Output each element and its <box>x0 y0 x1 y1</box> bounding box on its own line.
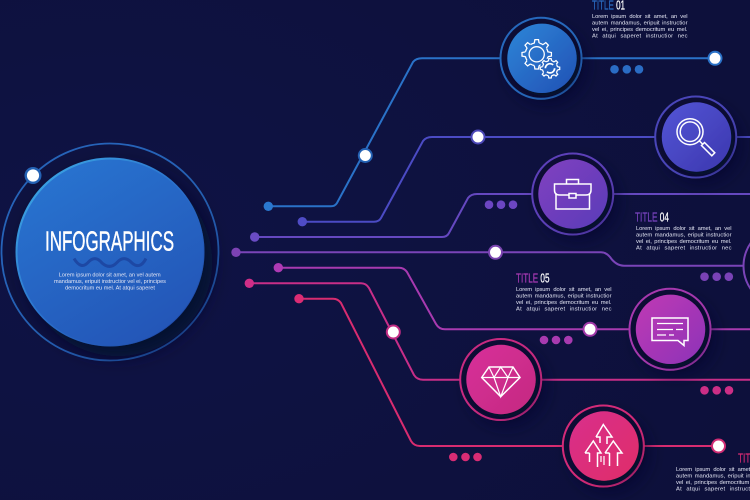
dots row 3 <box>485 200 517 209</box>
node circle 2: search <box>655 96 736 178</box>
icon: diamond <box>482 367 520 397</box>
main description: Lorem ipsum dolor sit amet, an vel autem <box>59 272 161 278</box>
main node <box>26 168 40 183</box>
text block: title 05: autem mandamus, eripuit instructior <box>516 294 612 300</box>
node circle 1: gears <box>500 18 582 99</box>
dots row 5 <box>540 336 573 344</box>
main circle panel <box>2 144 218 360</box>
icon: magnifier <box>677 119 715 156</box>
text block: title 01: At atqui saperet instructior nec <box>592 33 688 39</box>
dots row 4 <box>700 272 733 281</box>
wave decoration <box>74 258 146 266</box>
connector line 6: pink <box>245 279 750 380</box>
main circle panel: mandamus, eripuit instructior vel ei, principes <box>54 279 166 285</box>
node circle 4: partial <box>744 226 750 306</box>
text block: title 05: TITLE 05 <box>516 271 550 286</box>
text block: title 01: Lorem ipsum dolor sit amet, an vel <box>592 14 688 20</box>
connector line 5: magenta <box>274 263 750 336</box>
icon: gears <box>522 40 560 78</box>
text block: title 04: Lorem ipsum dolor sit amet, an vel <box>636 226 732 232</box>
connector line 3: violet <box>250 194 750 242</box>
text block: title 05 <box>516 271 612 312</box>
text block: title 04: TITLE 04 <box>635 210 669 225</box>
icon: briefcase <box>554 180 591 209</box>
node circle 6: diamond <box>460 339 541 420</box>
dots row 6 <box>700 386 733 395</box>
main circle panel: democritum eu mel. At atqui saperet <box>65 286 155 292</box>
text block: title 07 <box>676 451 750 492</box>
node circle 7: arrows <box>563 406 644 486</box>
text block: title 01: autem mandamus, eripuit instructior <box>592 20 688 26</box>
text block: title 04: autem mandamus, eripuit instructior <box>636 232 732 238</box>
connector line 1: blue <box>264 52 722 211</box>
text block: title 04: At atqui saperet instructior nec <box>636 246 732 252</box>
text block: title 05: At atqui saperet instructior nec <box>516 306 612 312</box>
dots row 7 <box>449 453 482 461</box>
text block: title 04: vel ei, principes democritum eu mel. <box>636 239 732 245</box>
connector line 2: indigo <box>298 130 750 226</box>
node circle 3: briefcase <box>532 154 613 234</box>
connector line 7: rose <box>294 294 725 452</box>
main title: INFOGRAPHICS <box>45 226 174 257</box>
text block: title 01 <box>592 0 688 39</box>
text block: title 05: vel ei, principes democritum eu mel. <box>516 300 612 306</box>
node circle 5: chat <box>630 289 710 370</box>
icon: arrows <box>585 424 622 467</box>
text block: title 04 <box>635 210 732 252</box>
icon: chat bubble <box>652 318 688 346</box>
connector line 4: purple <box>231 246 750 266</box>
dots row 1 <box>610 65 643 74</box>
text block: title 05: Lorem ipsum dolor sit amet, an vel <box>516 287 612 293</box>
text block: title 01: vel ei, principes democritum eu mel. <box>592 27 688 33</box>
